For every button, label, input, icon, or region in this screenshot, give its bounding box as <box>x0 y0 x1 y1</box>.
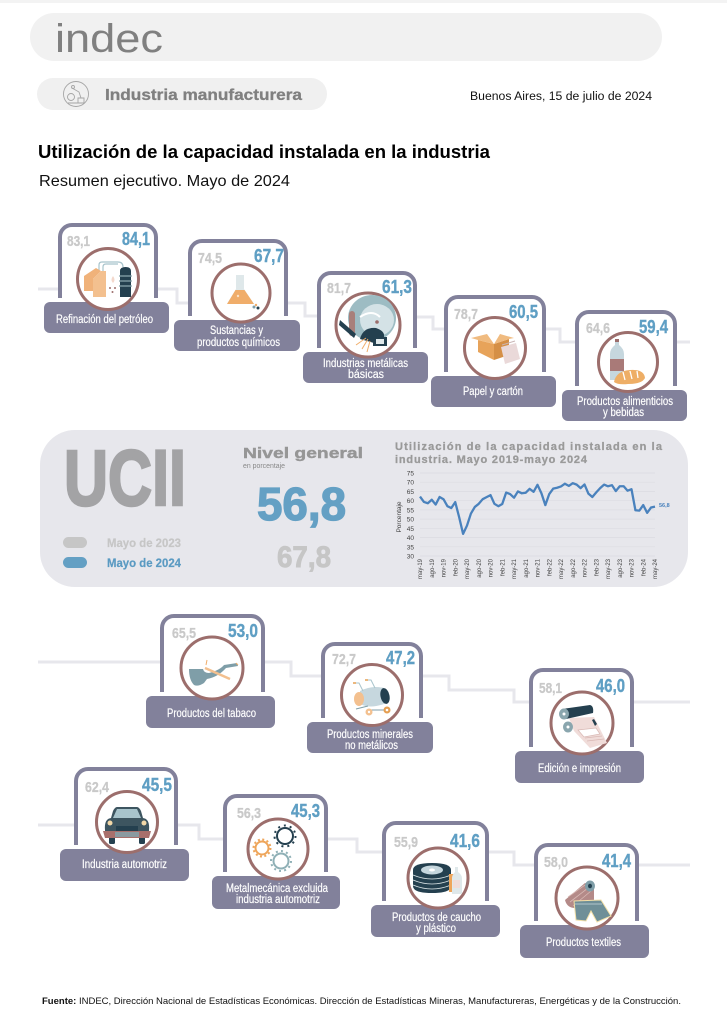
section pill: industria manufacturera: Industria manufacturera <box>105 87 302 104</box>
line chart: 40 <box>407 535 414 542</box>
line chart: feb-21 <box>500 558 506 576</box>
icon: cardboard box <box>464 318 526 378</box>
line chart: feb-20 <box>453 558 459 576</box>
nivel general heading <box>243 445 363 470</box>
label bar <box>212 876 340 909</box>
label text: industria automotriz <box>236 894 320 906</box>
line chart: nov-23 <box>630 558 636 577</box>
icon: bottle and bread <box>598 332 658 392</box>
UCII heading: UCII <box>64 433 186 522</box>
card: industria automotriz <box>60 769 189 881</box>
line chart: nov-22 <box>582 558 588 577</box>
line chart: 55 <box>407 507 414 514</box>
card: productos del tabaco <box>146 616 275 728</box>
current value: 61,3 <box>382 276 412 297</box>
label text <box>226 883 328 906</box>
card: metalmecánica excluida industria automotriz <box>212 796 340 909</box>
legend <box>63 536 181 570</box>
card: edición e impresión <box>515 670 644 783</box>
line chart: may-22 <box>559 558 565 579</box>
date: Buenos Aires, 15 de julio de 2024 <box>470 91 653 103</box>
label text: y bebidas <box>603 407 644 419</box>
current value: 46,0 <box>596 675 625 696</box>
line chart: 70 <box>407 480 414 487</box>
value: mayo 2024: 56,8 <box>257 478 346 530</box>
previous value: 62,4 <box>85 779 110 796</box>
section pill: industria manufacturera <box>37 78 327 110</box>
previous value: 74,5 <box>198 250 222 267</box>
card: productos textiles <box>520 845 649 958</box>
previous value: 78,7 <box>454 306 478 323</box>
icon: metal grinder <box>336 293 400 357</box>
label text: Productos minerales <box>327 729 413 741</box>
line chart: 65 <box>407 489 414 496</box>
previous value: 83,1 <box>67 233 90 250</box>
icon: car <box>96 792 158 852</box>
current value: 41,4 <box>602 850 632 871</box>
line chart: 30 <box>407 554 414 560</box>
line chart: ago-23 <box>618 558 624 578</box>
line chart: feb-23 <box>594 558 600 576</box>
label bar <box>371 905 500 937</box>
current value: 41,6 <box>450 830 480 851</box>
label bar <box>431 376 556 407</box>
previous value: 56,3 <box>237 805 261 822</box>
label bar <box>515 751 644 783</box>
chart heading: Utilización de la capacidad instalada en la <box>395 441 663 453</box>
icon: industry badge <box>64 82 88 106</box>
card: industrias metálicas básicas <box>303 273 428 383</box>
line chart: may-24 <box>653 558 659 579</box>
line chart: may-19 <box>418 558 424 579</box>
icon: flask <box>212 264 270 322</box>
line chart: ago-21 <box>524 558 530 578</box>
chart heading <box>395 441 663 466</box>
current value: 67,7 <box>254 245 284 266</box>
current value: 53,0 <box>228 620 258 641</box>
icon: pipe <box>181 637 243 699</box>
label text <box>327 729 413 752</box>
current value: 47,2 <box>386 647 415 668</box>
label text: Productos textiles <box>546 937 621 949</box>
subtitle: Resumen ejecutivo. Mayo de 2024 <box>39 173 290 190</box>
label text: Productos del tabaco <box>167 708 256 720</box>
label text <box>323 358 408 381</box>
line chart: nov-20 <box>488 558 494 577</box>
previous value: 55,9 <box>394 834 418 851</box>
line chart: may-23 <box>606 558 612 579</box>
previous value: 72,7 <box>332 651 356 668</box>
label text: Papel y cartón <box>463 386 523 398</box>
label text: Industrias metálicas <box>323 358 408 370</box>
icon: thread spool and shorts <box>556 867 618 929</box>
line chart: may-21 <box>512 558 518 579</box>
label text: Edición e impresión <box>538 763 621 775</box>
line chart: 75 <box>407 470 414 478</box>
label text: básicas <box>348 369 384 381</box>
current value: 45,3 <box>291 800 320 821</box>
label text: productos químicos <box>197 337 280 349</box>
line chart: may-20 <box>465 558 471 579</box>
label text: Productos de caucho <box>392 912 481 924</box>
label bar <box>303 352 428 383</box>
previous value: 65,5 <box>172 625 196 642</box>
label text: Industria automotriz <box>82 859 167 871</box>
nivel general heading: Nivel general <box>243 445 363 462</box>
line chart: feb-24 <box>641 558 647 576</box>
line chart: 45 <box>407 526 414 533</box>
connector line: top row <box>38 289 690 342</box>
label text <box>197 325 280 349</box>
logo: indec: indec <box>55 17 163 61</box>
header band with logo <box>30 13 662 61</box>
previous value: 81,7 <box>327 280 351 297</box>
previous value: 58,1 <box>539 680 562 697</box>
label text: Refinación del petróleo <box>56 314 153 326</box>
line chart: feb-22 <box>547 558 553 576</box>
connector line: middle row <box>38 662 690 702</box>
nivel general heading: en porcentaje <box>243 463 285 470</box>
value: mayo 2023: 67,8 <box>277 541 331 574</box>
label text <box>392 912 481 935</box>
label bar <box>60 849 189 881</box>
label text: Metalmecánica excluida <box>226 883 328 895</box>
title: Utilización de la capacidad instalada en la industria <box>38 142 491 162</box>
card: productos de caucho y plástico <box>371 823 500 937</box>
line chart: 56,8 <box>659 503 670 509</box>
icon: concrete mixer <box>342 664 402 726</box>
label bar <box>307 722 433 753</box>
current value: 60,5 <box>509 301 538 322</box>
icon: tire and plastic bottle <box>408 848 468 908</box>
label bar <box>520 925 649 958</box>
card: productos alimenticios y bebidas <box>562 312 687 421</box>
label bar <box>562 390 687 421</box>
label text: no metálicos <box>345 740 398 752</box>
legend: Mayo de 2024 <box>107 556 181 570</box>
line chart: ago-20 <box>477 558 483 578</box>
card: refinación del petróleo <box>44 225 169 333</box>
line chart: ago-19 <box>430 558 436 578</box>
line chart: Porcentaje <box>396 501 403 533</box>
current value: 59,4 <box>639 316 669 337</box>
previous value: 58,0 <box>544 854 568 871</box>
panel: UCII nivel general <box>40 430 688 587</box>
label text: Sustancias y <box>210 325 263 337</box>
label bar <box>146 696 275 728</box>
label bar <box>174 320 300 351</box>
label text: Productos alimenticios <box>577 396 673 408</box>
card: papel y cartón <box>431 297 556 407</box>
icon: gears <box>248 819 308 879</box>
label bar <box>44 302 169 333</box>
line chart <box>396 470 670 579</box>
icon: refinery <box>78 248 138 310</box>
line chart: ago-22 <box>571 558 577 578</box>
previous value: 64,6 <box>586 320 610 337</box>
current value: 84,1 <box>122 228 150 249</box>
footer source: Fuente: INDEC, Dirección Nacional de Estadísticas Económicas. Dirección de Estadísticas Mineras, Manufactureras, Energéticas y de la Construcción. <box>42 996 681 1007</box>
line chart: 50 <box>407 517 414 524</box>
line chart: 35 <box>407 544 414 551</box>
label text <box>577 396 673 419</box>
label text: y plástico <box>416 923 456 935</box>
line chart: 60 <box>407 498 414 505</box>
legend: Mayo de 2023 <box>107 536 181 550</box>
icon: printing rollers <box>551 692 613 754</box>
line chart: nov-19 <box>442 558 448 577</box>
current value: 45,5 <box>142 774 172 795</box>
connector line: bottom row <box>38 825 690 865</box>
card: productos minerales no metálicos <box>307 644 433 753</box>
card: sustancias y productos químicos <box>174 241 300 351</box>
line chart: nov-21 <box>536 558 542 577</box>
chart heading: industria. Mayo 2019-mayo 2024 <box>395 454 588 466</box>
